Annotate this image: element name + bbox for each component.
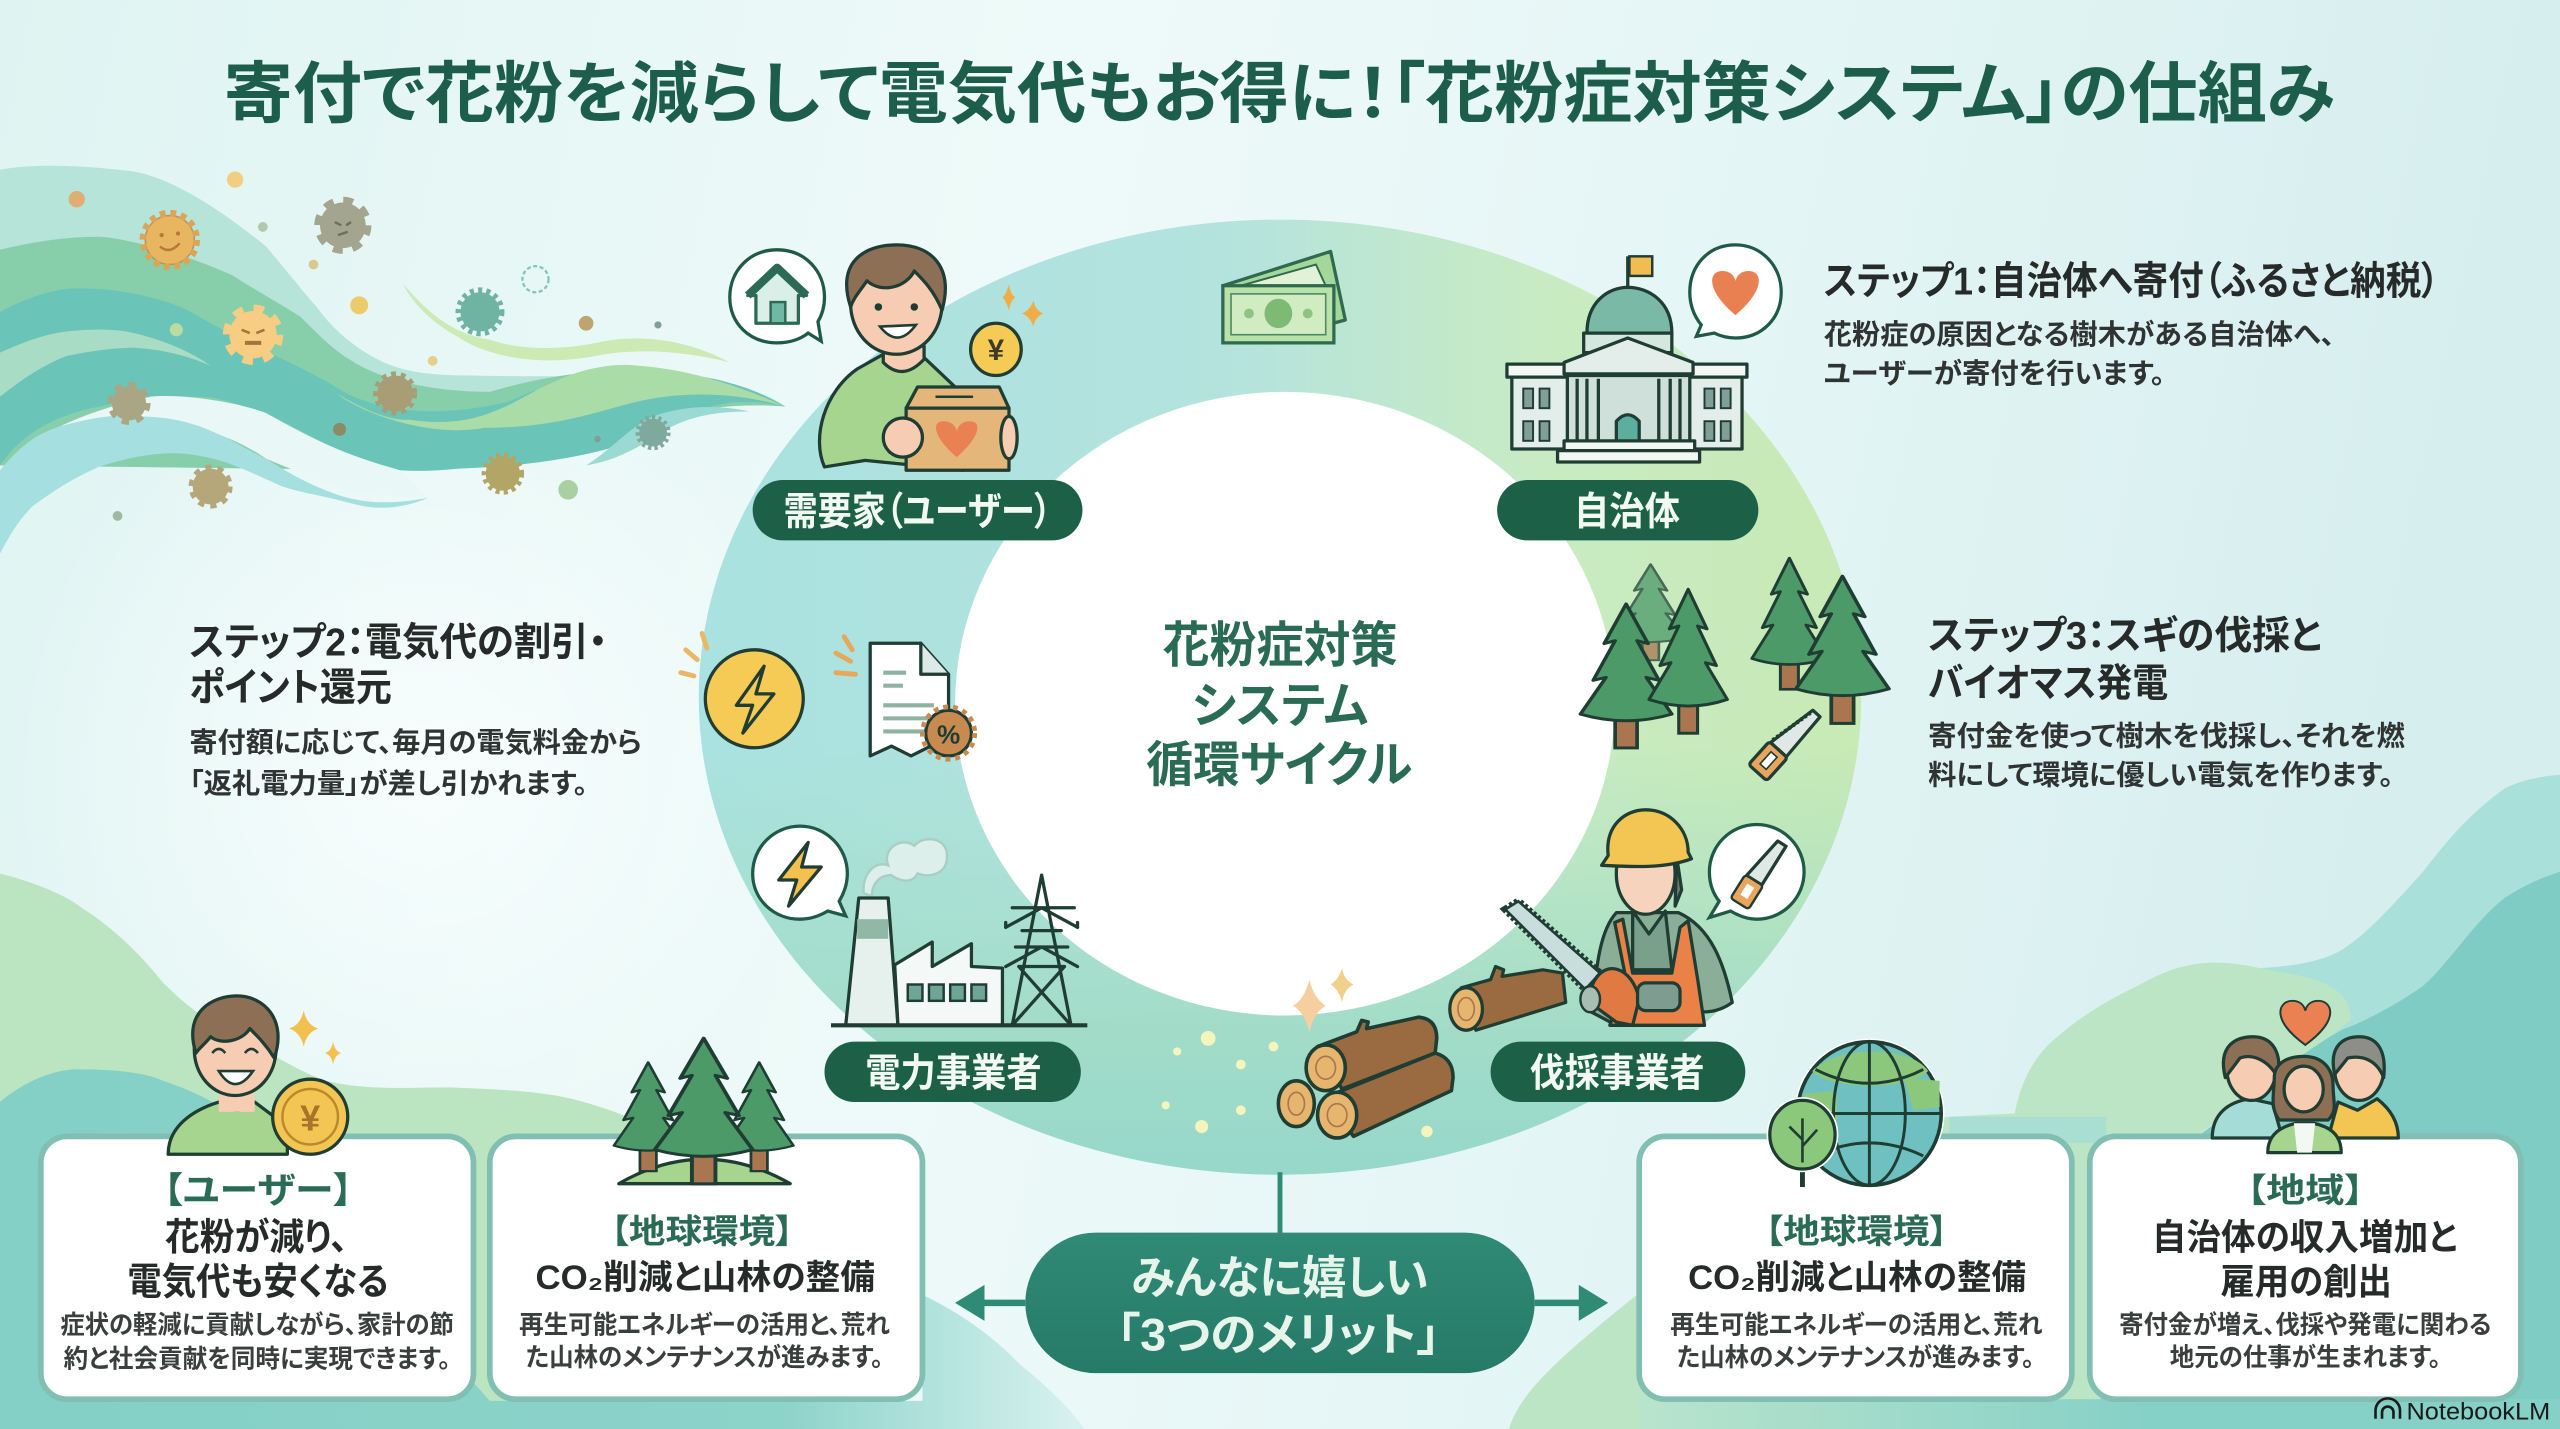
- wind waves: [0, 166, 785, 553]
- center label: 花粉症対策: [1162, 619, 1398, 673]
- merit badge: [1025, 1233, 1535, 1373]
- card: global environment left: [490, 1136, 922, 1399]
- steps: [1564, 441, 1695, 451]
- brand: NotebookLM: NotebookLM: [2407, 1398, 2550, 1425]
- icon: forest: [1580, 558, 1889, 781]
- coin: ¥: [300, 1098, 320, 1139]
- icon: globe and tree: [1767, 1038, 1944, 1189]
- background hills left: [0, 873, 1086, 1429]
- head: [883, 346, 924, 372]
- pollen: yellow angry: [228, 309, 278, 360]
- card: region: 寄付金が増え、伐採や発電に関わる: [2119, 1310, 2491, 1339]
- speech bubble: saw: [1709, 824, 1804, 919]
- pylon: [1006, 875, 1078, 1025]
- card: user: 約と社会貢献を同時に実現できます。: [64, 1346, 451, 1374]
- step 3 text: 料にして環境に優しい電気を作ります。: [1928, 760, 2393, 791]
- yen coin: ¥: [988, 334, 1005, 367]
- card: global environment left: CO₂削減と山林の整備: [536, 1259, 875, 1297]
- smoke: [864, 839, 947, 896]
- center label: 循環サイクル: [1146, 738, 1412, 792]
- icon: happy user with coin: [168, 996, 348, 1154]
- helmet: [1602, 810, 1691, 867]
- person center: [2268, 1056, 2341, 1153]
- sparkles: glow: [1162, 968, 1433, 1137]
- sparkles: [289, 1011, 341, 1064]
- icon: power plant: [753, 826, 1087, 1025]
- cycle ring: [699, 220, 1861, 1175]
- portico: [1567, 376, 1690, 444]
- arrow left: [955, 1285, 1025, 1321]
- card: region: 【地域】: [2247, 1173, 2364, 1210]
- pollen: brown small group: [110, 374, 669, 506]
- card: global environment left: 再生可能エネルギーの活用と、荒れ: [519, 1311, 890, 1339]
- label: logging company: 伐採事業者: [1530, 1052, 1704, 1095]
- icon: bill with discount: %: [937, 719, 960, 749]
- card: global environment left: た山林のメンテナンスが進みます。: [526, 1343, 883, 1372]
- speech bubble: heart: [1690, 245, 1781, 338]
- label: consumer: [753, 480, 1082, 540]
- card: user: 症状の軽減に貢献しながら、家計の節: [60, 1310, 454, 1339]
- label: power company: 電力事業者: [865, 1052, 1042, 1095]
- person left: [2212, 1037, 2282, 1138]
- shirt collar: [1633, 911, 1672, 970]
- icon: bill with discount: [870, 643, 975, 759]
- ground: [831, 1024, 1087, 1027]
- dome: [1587, 287, 1672, 333]
- merit badge: みんなに嬉しい: [1131, 1253, 1429, 1304]
- card: global environment right: 再生可能エネルギーの活用と、荒れ: [1670, 1311, 2042, 1339]
- heart: [2280, 1001, 2330, 1045]
- arrow right: [1535, 1285, 1608, 1321]
- step 1 text: ユーザーが寄付を行います。: [1824, 358, 2165, 389]
- icon: community people: [2212, 1001, 2398, 1153]
- yen coin: [971, 323, 1021, 376]
- step 2 text: 寄付額に応じて、毎月の電気料金から: [189, 727, 642, 758]
- coin: [273, 1079, 348, 1154]
- step 3 text: ステップ3：スギの伐採と: [1928, 615, 2322, 658]
- label: power company: [824, 1042, 1081, 1102]
- step 1 text: [1824, 261, 2439, 389]
- card: global environment right: [1639, 1136, 2072, 1399]
- label: municipality: [1497, 480, 1758, 540]
- card: user: 電気代も安くなる: [127, 1260, 389, 1302]
- torso: [168, 1102, 287, 1154]
- icon: trees on hill: [614, 1038, 793, 1184]
- background hills right: [1509, 775, 2560, 1429]
- person right: [2328, 1037, 2398, 1138]
- pollen: dots: [69, 171, 662, 521]
- card: region: 自治体の収入増加と: [2152, 1217, 2457, 1258]
- label: consumer: 需要家（ユーザー）: [784, 491, 1051, 534]
- donation box: [906, 387, 1009, 470]
- pollen: grey: [318, 201, 367, 250]
- icon: user with donation box: [730, 245, 1043, 470]
- center label: システム: [1192, 680, 1368, 734]
- step 1 text: 花粉症の原因となる樹木がある自治体へ、: [1824, 319, 2335, 350]
- chainsaw: [1505, 901, 1639, 1025]
- card: global environment left: 【地球環境】: [611, 1214, 793, 1251]
- card: global environment right: た山林のメンテナンスが進みます。: [1677, 1343, 2034, 1372]
- step 2 text: ステップ2：電気代の割引・: [189, 621, 607, 664]
- step 2 text: [189, 621, 642, 799]
- icon: bolt coin: [681, 633, 856, 748]
- center label: [1146, 619, 1412, 792]
- gloves: [1638, 983, 1680, 1011]
- small tree: [1767, 1097, 1838, 1187]
- small log: [1450, 967, 1566, 1030]
- card: global environment right: CO₂削減と山林の整備: [1688, 1259, 2026, 1297]
- head: [1616, 833, 1675, 914]
- step 2 text: ポイント還元: [189, 667, 392, 710]
- hands: [883, 418, 922, 457]
- torso: [819, 354, 963, 470]
- speech bubble: bolt: [753, 826, 847, 919]
- step 3 text: [1928, 615, 2405, 791]
- step 3 text: バイオマス発電: [1928, 662, 2168, 705]
- icon: money: [1223, 251, 1345, 343]
- pollen: orange smiling: [143, 213, 197, 267]
- icon: logging worker: [1450, 810, 1804, 1030]
- card: global environment right: 【地球環境】: [1765, 1214, 1948, 1251]
- step 2 text: 「返礼電力量」が差し引かれます。: [189, 768, 588, 799]
- torso: [1592, 913, 1732, 1025]
- speech bubble: house: [730, 250, 824, 343]
- icon: log pile: [1278, 1017, 1453, 1138]
- neck: [219, 1091, 255, 1112]
- apron: [1610, 919, 1704, 1025]
- factory: [895, 942, 1002, 1025]
- hand saw: [1749, 703, 1822, 781]
- card: user: 【ユーザー】: [163, 1169, 353, 1210]
- wings: [1507, 364, 1747, 377]
- title: 寄付で花粉を減らして電気代もお得に！「花粉症対策システム」の仕組み: [224, 57, 2335, 132]
- chimney: [846, 898, 898, 1025]
- step 3 text: 寄付金を使って樹木を伐採し、それを燃: [1928, 721, 2405, 752]
- label: logging company: [1491, 1042, 1745, 1102]
- icon: city hall: [1507, 245, 1781, 462]
- sparkles: [1002, 284, 1043, 327]
- label: municipality: 自治体: [1574, 491, 1680, 534]
- flag: [1627, 256, 1629, 287]
- card: user: [41, 1136, 473, 1399]
- head: [194, 1004, 276, 1096]
- pollen: outline: [522, 266, 549, 292]
- card: region: 地元の仕事が生まれます。: [2170, 1343, 2441, 1372]
- merit badge: 「3つのメリット」: [1117, 1310, 1440, 1361]
- pollen particles: [69, 171, 669, 521]
- step 1 text: ステップ1：自治体へ寄付（ふるさと納税）: [1824, 261, 2439, 304]
- card: user: 花粉が減り、: [165, 1216, 348, 1258]
- card: region: 雇用の創出: [2220, 1261, 2392, 1302]
- connector line: [1278, 1172, 1282, 1234]
- card: region: [2090, 1136, 2521, 1399]
- pollen: teal: [459, 291, 501, 333]
